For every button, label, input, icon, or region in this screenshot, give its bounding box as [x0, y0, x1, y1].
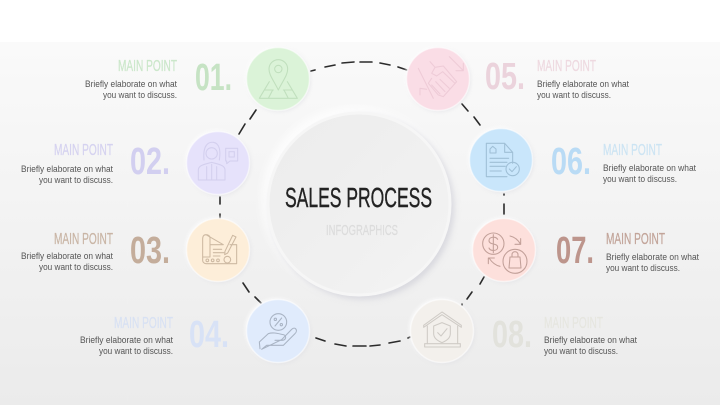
step 02 text: you want to discuss.: [39, 175, 113, 185]
step 03 text: Briefly elaborate on what: [21, 251, 113, 261]
step 04 text: MAIN POINT: [114, 315, 173, 332]
step 04 text: Briefly elaborate on what: [80, 335, 173, 345]
step 06 text: Briefly elaborate on what: [603, 163, 696, 173]
step 07 text: MAIN POINT: [606, 231, 665, 248]
step 04 circle and hand percent icon: [246, 300, 310, 362]
step 01 text: MAIN POINT: [118, 58, 177, 75]
step 02 text: MAIN POINT: [54, 142, 113, 159]
step 07 text: 07.: [556, 230, 594, 272]
step 05 text: MAIN POINT: [537, 58, 596, 75]
step 01 text: you want to discuss.: [103, 90, 177, 100]
step 03 text: [21, 230, 170, 272]
step 08 text: [492, 314, 637, 356]
step 06 text: [551, 141, 696, 184]
step 03 text: MAIN POINT: [54, 231, 113, 248]
step 05 text: 05.: [485, 56, 525, 98]
step 07 text: [556, 230, 699, 273]
step 08 text: MAIN POINT: [544, 315, 603, 332]
step 01 text: 01.: [195, 57, 232, 99]
title: SALES PROCESS: [285, 182, 432, 213]
subtitle: INFOGRAPHICS: [326, 222, 398, 239]
step 07 circle and money exchange icon: [472, 218, 536, 282]
step 05 text: [485, 56, 629, 100]
step 04 text: [80, 314, 229, 356]
step 08 text: Briefly elaborate on what: [544, 335, 637, 345]
step 01 circle and map pin icon: [246, 48, 310, 110]
step 02 text: 02.: [130, 141, 170, 183]
step 04 text: you want to discuss.: [99, 346, 173, 356]
step 08 circle and home shield icon: [410, 300, 474, 362]
step 06 circle and document check icon: [470, 128, 532, 192]
step 03 circle and blueprint icon: [186, 218, 250, 282]
step 06 text: MAIN POINT: [603, 142, 662, 159]
step 02 text: [21, 141, 170, 185]
step 06 text: you want to discuss.: [603, 174, 677, 184]
step 03 text: you want to discuss.: [39, 262, 113, 272]
step 07 text: you want to discuss.: [606, 263, 680, 273]
step 01 text: Briefly elaborate on what: [85, 79, 177, 89]
step 02 text: Briefly elaborate on what: [21, 164, 113, 174]
step 04 text: 04.: [189, 314, 229, 356]
center disc with title: [268, 113, 450, 295]
step 07 text: Briefly elaborate on what: [606, 252, 699, 262]
dashed ring connector: [220, 62, 504, 346]
step 02 circle and person icon: [186, 132, 250, 194]
step 08 text: 08.: [492, 314, 532, 356]
step 05 text: you want to discuss.: [537, 90, 611, 100]
step 03 text: 03.: [130, 230, 170, 272]
step 05 text: Briefly elaborate on what: [537, 79, 629, 89]
step 08 text: you want to discuss.: [544, 346, 618, 356]
step 05 circle and handshake icon: [406, 48, 470, 110]
step 06 text: 06.: [551, 141, 591, 183]
step 01 text: [85, 57, 232, 100]
